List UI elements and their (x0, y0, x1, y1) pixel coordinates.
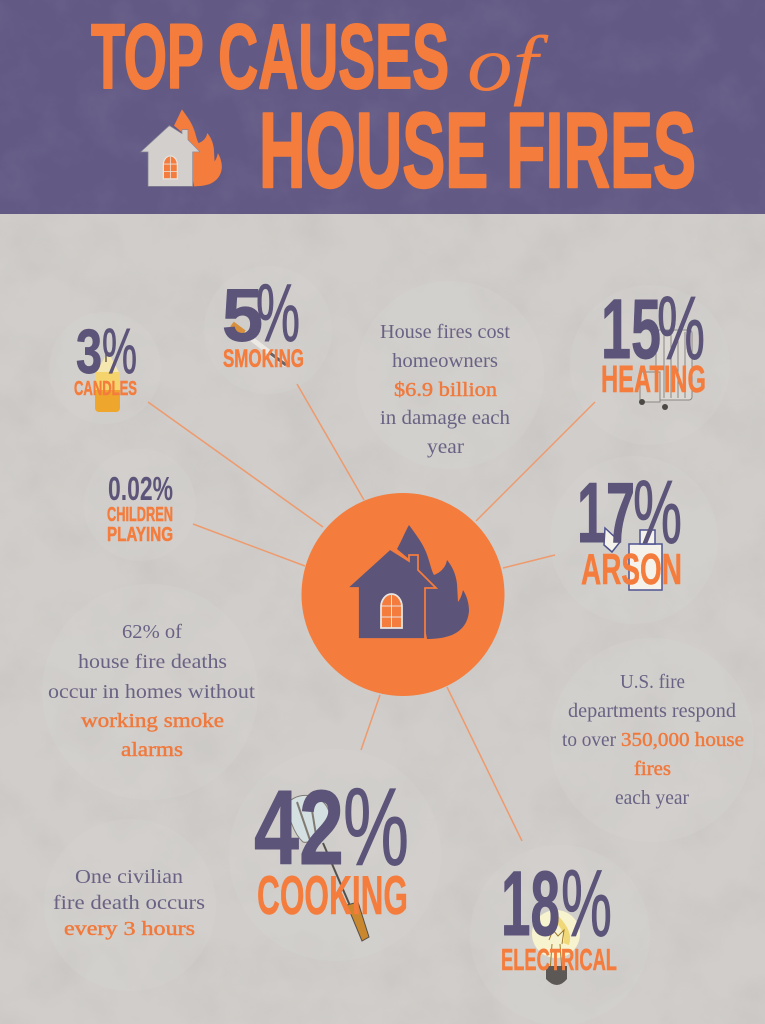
fact: damage cost: House fires cost (380, 322, 511, 343)
stat: 42% cooking (254, 766, 409, 941)
icon: header burning house (141, 109, 222, 186)
icon: candle (95, 350, 120, 412)
stat: 5% smoking: % (256, 268, 300, 359)
stat: 17% arson (577, 463, 682, 594)
header banner (0, 0, 765, 214)
figure: 0.02% (108, 470, 173, 507)
label: CANDLES (74, 378, 137, 400)
label: ELECTRICAL (501, 942, 617, 977)
stat: 17% arson: % (633, 463, 682, 563)
fact: civilian deaths: One civilian (75, 867, 183, 888)
title line: top causes: TOP CAUSES (91, 6, 449, 108)
fact: smoke alarms: alarms (121, 740, 183, 761)
faint circle backdrops (42, 266, 754, 1024)
stat: 3% candles (74, 315, 137, 412)
icon: central burning house (347, 525, 469, 639)
figure: 3 (76, 318, 102, 387)
stat: 15% heating (601, 279, 706, 410)
stat: 42% cooking: % (343, 766, 409, 889)
figure: 5 (222, 274, 263, 357)
label line 2: PLAYING (107, 524, 173, 546)
fact: fire departments: U.S. fire (620, 672, 685, 693)
stat: 3% candles: % (102, 315, 137, 387)
title word: of: of (467, 20, 549, 107)
figure: 18 (501, 853, 560, 955)
label: COOKING (257, 864, 408, 926)
label: HEATING (601, 359, 706, 401)
fact: smoke alarms (48, 622, 256, 761)
fact: fire departments (562, 672, 744, 809)
stat: 18% electrical: % (561, 851, 612, 957)
fact: smoke alarms: 62% of (122, 622, 183, 643)
icon: cigarette (232, 324, 286, 365)
fact: smoke alarms: working smoke (81, 711, 224, 732)
fact: fire departments: each year (615, 788, 689, 809)
stat: 5% smoking (222, 268, 304, 373)
fact: smoke alarms: occur in homes without (48, 682, 256, 703)
fact: damage cost: homeowners (392, 351, 498, 372)
stat: 15% heating: % (657, 279, 705, 379)
label line 1: CHILDREN (107, 504, 173, 526)
figure: 15 (601, 282, 661, 376)
fact: fire departments: fires (634, 759, 671, 780)
fact: fire departments: departments respond (568, 701, 736, 722)
label: SMOKING (223, 345, 304, 373)
fact: civilian deaths: every 3 hours (64, 919, 195, 940)
icon: whisk (288, 795, 369, 941)
label: ARSON (581, 545, 682, 594)
icon: radiator (639, 330, 692, 410)
stat: 0.02% children playing (107, 470, 173, 546)
fact: smoke alarms: house fire deaths (78, 652, 227, 673)
figure: 17 (577, 466, 635, 561)
fact: fire departments: to over (562, 730, 616, 751)
connector lines (148, 384, 595, 841)
central orange circle (302, 493, 504, 696)
fact: damage cost (380, 322, 511, 458)
figure: 42 (254, 769, 344, 887)
stat: 18% electrical (501, 851, 617, 985)
fact: damage cost: year (427, 437, 465, 458)
fact: civilian deaths: fire death occurs (53, 893, 205, 914)
title (91, 6, 696, 210)
fact: civilian deaths (53, 867, 205, 940)
icon: gas can (604, 528, 662, 590)
fact: damage cost: in damage each (380, 408, 510, 429)
icon: light bulb (532, 910, 580, 985)
fact: fire departments: 350,000 house (621, 730, 744, 751)
fact: damage cost: $6.9 billion (394, 380, 497, 401)
